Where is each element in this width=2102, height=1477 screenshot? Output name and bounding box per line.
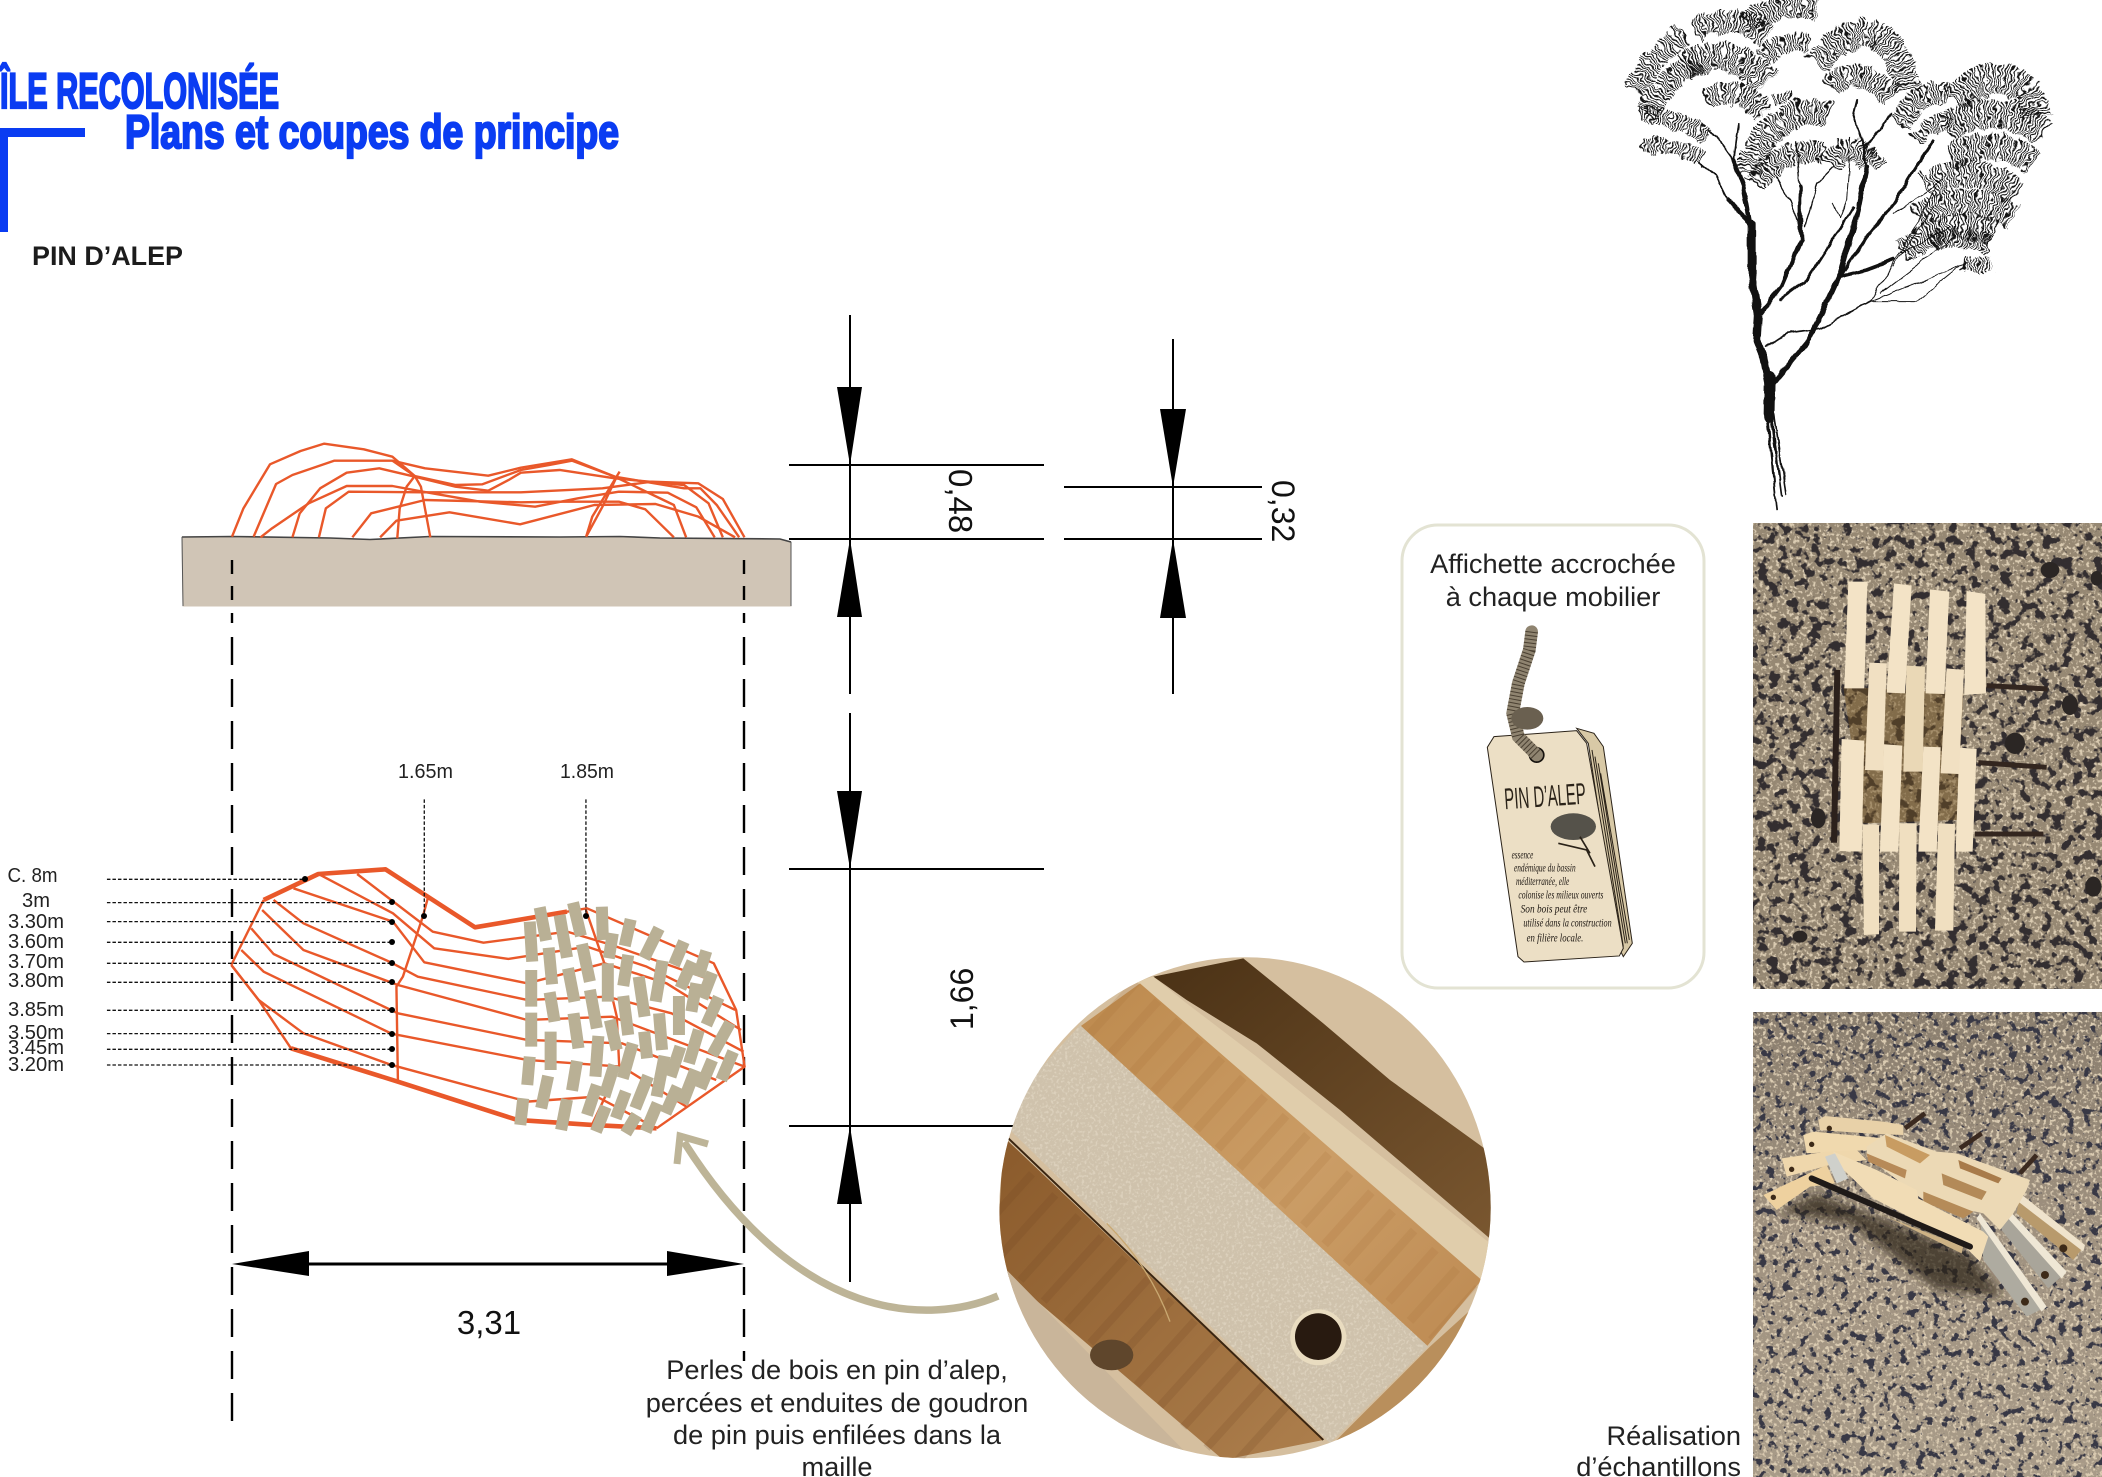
height labels: 3.50m [8,1022,64,1044]
height labels: 1.85m [560,761,614,783]
drill holes [1771,1126,2067,1306]
dimension: 0,48: 0,48 [942,469,979,533]
orange section lines [232,444,744,538]
height labels: 3.30m [8,911,64,933]
height labels [8,761,614,1076]
dimension: 0,32 [1064,339,1301,694]
panel caption: Affichette accrochée [1430,548,1676,579]
dark speckles [1753,523,2102,989]
orange band stripes [1110,1005,1454,1313]
wood beads [520,903,733,1133]
pale strip [1137,977,1490,1280]
subtitle: Plans et coupes de principe: Plans et coupes de principe [125,105,619,158]
drilled hole [1290,1309,1346,1365]
caption: réalisation d'échantillons: Réalisation [1606,1420,1741,1451]
icon: wooden tag with rope: en filière locale. [1527,931,1583,945]
orange wood band [1080,983,1482,1347]
horizontal rods [1975,686,2048,834]
icon: wooden tag with rope [1487,632,1632,962]
height labels: 3.60m [8,931,64,953]
icon: wooden tag with rope: utilisé dans la construction [1523,916,1612,930]
dark blotches [1793,562,2102,943]
lower strip [1873,1212,1963,1253]
panel: affichette [1402,525,1704,988]
left legs [1763,1116,1903,1210]
dark rod [1812,1178,1970,1247]
dimension: 1,66 [789,713,1044,1282]
panel caption [1430,548,1676,612]
photo: arched wooden sample on granite [1753,1012,2102,1477]
ground block [182,536,791,606]
icon: wooden tag with rope: colonise les milieux ouverts [1518,887,1604,901]
photo: flat wooden sample on granite [1753,523,2102,989]
granite ground [1753,1012,2102,1477]
plan view: net with beads [8,761,745,1133]
upper right pale wood [990,950,1500,1460]
dimension: 3,31: 3,31 [457,1304,521,1341]
wood pieces [1839,582,1986,935]
beam lower edge [1008,1138,1323,1440]
recesses [1867,1135,2002,1218]
caption: perles de bois: Perles de bois en pin d’alep, [666,1354,1008,1385]
section heading: PIN D'ALEP: PIN D’ALEP [32,241,183,271]
survey dots [302,876,589,1068]
icon: wooden tag with rope: PIN D’ALEP [1503,778,1587,816]
height labels: 3.70m [8,951,64,973]
trunk and branches [1700,100,1967,510]
granite ground [1753,523,2102,989]
icon: wooden tag with rope: Son bois peut être [1521,902,1588,916]
right legs [1977,1193,2085,1317]
panel frame [1402,525,1704,988]
lower brown stripes [1000,1203,1273,1450]
icon: wooden tag with rope: endémique du bassin [1514,861,1576,875]
orange plan mesh [107,799,745,1133]
cast shadow [1778,1193,2003,1297]
bottom right wood [1336,1312,1468,1440]
fine splinter [1107,1223,1170,1322]
caption: perles de bois: percées et enduites de goudron [646,1387,1028,1418]
foliage [1633,6,2043,265]
dark speckles [1753,1012,2102,1477]
grey end cap [1825,1153,1848,1183]
height labels: C. 8m [8,865,58,887]
height labels: 3.80m [8,970,64,992]
dimension: 1,66: 1,66 [944,968,980,1030]
horizontal leader lines [107,799,586,1065]
light grains [1753,523,2102,989]
height labels: 1.65m [398,761,453,783]
panel caption: à chaque mobilier [1446,581,1660,612]
caption: perles de bois: de pin puis enfilées dans la [673,1419,1002,1450]
lower brown wood [997,1137,1323,1460]
shadow under wood [1843,687,1963,823]
height labels: 3m [22,890,50,912]
metal rods [1834,670,1837,843]
height labels: 3.45m [8,1037,64,1059]
light grains [1753,1012,2102,1477]
icon: wooden tag with rope: essence [1512,847,1534,861]
dimension: 0,32: 0,32 [1265,480,1301,542]
curved arrow from photo to beads [677,1136,998,1310]
icon: wooden tag with rope: méditerranée, elle [1516,874,1570,888]
title: ÎLE RECOLONISÉE: ÎLE RECOLONISÉE [0,63,279,119]
ground end strokes [182,537,791,606]
illustration: Aleppo pine tree [1633,6,2043,510]
front beam [1833,1152,1988,1262]
photo: wood bead in circle [990,950,1500,1460]
back rods [1905,1113,2037,1173]
knot [1090,1340,1133,1370]
dark shadow band [1153,958,1493,1240]
lower pale wood [1007,1270,1184,1450]
dashed vertical guides [232,560,744,1421]
dimension: 3,31 [232,1251,744,1341]
dimension: 0,48 [789,315,1044,694]
blue corner bracket [0,128,85,232]
caption: perles de bois [646,1354,1028,1477]
lattice body [1867,1133,2030,1230]
ground top line [182,536,791,542]
section view: ground and net [182,444,791,606]
height labels: 3.85m [8,999,64,1021]
height labels: 3.20m [8,1054,64,1076]
caption: réalisation d'échantillons [1576,1420,1741,1477]
main beam [997,1025,1428,1443]
beam grain [997,1023,1430,1445]
